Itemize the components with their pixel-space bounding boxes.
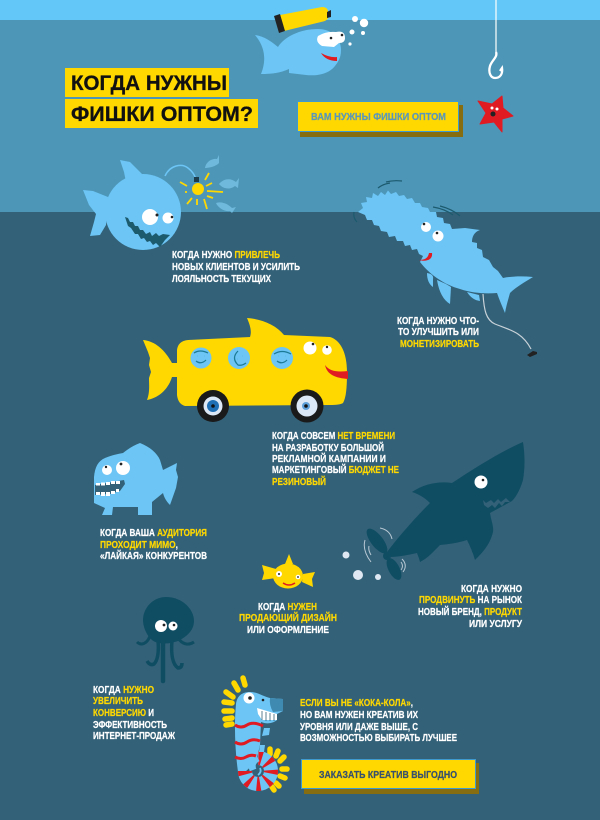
icon: diver fish with yellow tank <box>255 7 368 75</box>
text: promote brand: КОГДА НУЖНО <box>461 584 522 595</box>
text: conversion: КОГДА НУЖНО <box>93 685 154 696</box>
text: improve or monetize: КОГДА НУЖНО ЧТО- <box>397 316 479 327</box>
text: selling design: ПРОДАЮЩИЙ ДИЗАЙН <box>239 611 337 624</box>
text: conversion: ИНТЕРНЕТ-ПРОДАЖ <box>93 731 176 742</box>
button: order creative <box>302 760 479 794</box>
text: selling design <box>239 602 337 636</box>
text: promote brand <box>418 584 523 630</box>
text: attract clients: НОВЫХ КЛИЕНТОВ И УСИЛИТЬ <box>172 262 300 273</box>
icon: fishing hook <box>489 0 502 78</box>
text: selling design: ИЛИ ОФОРМЛЕНИЕ <box>247 625 329 636</box>
text: no time or budget <box>272 431 399 488</box>
text: audience passes by: ПРОХОДИТ МИМО, <box>100 540 178 551</box>
text: promote brand: ИЛИ УСЛУГУ <box>469 619 523 630</box>
text: no time or budget: РЕКЛАМНОЙ КАМПАНИИ И <box>272 452 386 465</box>
text: not coca-cola: ВОЗМОЖНОСТЬЮ ВЫБИРАТЬ ЛУЧШЕЕ <box>300 733 457 744</box>
button: order creative: ЗАКАЗАТЬ КРЕАТИВ ВЫГОДНО <box>319 770 457 781</box>
text: attract clients: КОГДА НУЖНО ПРИВЛЕЧЬ <box>172 250 280 261</box>
title: ФИШКИ ОПТОМ? <box>71 103 253 126</box>
text: audience passes by <box>100 528 207 562</box>
icon: small yellow fish <box>262 554 315 588</box>
button: top: ВАМ НУЖНЫ ФИШКИ ОПТОМ <box>311 112 446 123</box>
text: conversion: УВЕЛИЧИТЬ <box>93 696 143 707</box>
title <box>65 68 258 128</box>
text: attract clients: ЛОЯЛЬНОСТЬ ТЕКУЩИХ <box>172 274 271 285</box>
text: conversion: КОНВЕРСИЮ И <box>93 708 154 719</box>
text: no time or budget: РЕЗИНОВЫЙ <box>272 475 326 488</box>
icon: yellow fish bus <box>143 318 348 422</box>
text: improve or monetize: ТО УЛУЧШИТЬ ИЛИ <box>398 327 479 338</box>
text: conversion <box>93 685 176 742</box>
text: not coca-cola: ЕСЛИ ВЫ НЕ «КОКА-КОЛА», <box>300 698 413 709</box>
icon: sawfish with balloon string <box>354 181 537 357</box>
icon: anglerfish with lightbulb <box>83 155 239 250</box>
text: no time or budget: МАРКЕТИНГОВЫЙ БЮДЖЕТ НЕ <box>272 463 399 476</box>
icon: red starfish <box>478 96 513 132</box>
text: not coca-cola <box>300 698 457 744</box>
text: no time or budget: НА РАЗРАБОТКУ БОЛЬШОЙ <box>272 441 384 454</box>
text: not coca-cola: УРОВНЯ ИЛИ ДАЖЕ ВЫШЕ, С <box>300 722 418 733</box>
icon: seahorse <box>224 678 287 790</box>
text: attract clients <box>172 250 300 285</box>
icon: octopus <box>137 597 194 681</box>
text: not coca-cola: НО ВАМ НУЖЕН КРЕАТИВ ИХ <box>300 710 418 721</box>
text: audience passes by: «ЛАЙКАЯ» КОНКУРЕНТОВ <box>100 549 207 562</box>
text: improve or monetize: МОНЕТИЗИРОВАТЬ <box>400 339 479 350</box>
text: conversion: ЭФФЕКТИВНОСТЬ <box>93 720 167 731</box>
text: no time or budget: КОГДА СОВСЕМ НЕТ ВРЕМЕНИ <box>272 431 395 442</box>
text: promote brand: НОВЫЙ БРЕНД, ПРОДУКТ <box>418 605 522 618</box>
button: top <box>298 102 463 137</box>
text: improve or monetize <box>397 316 479 350</box>
text: audience passes by: КОГДА ВАША АУДИТОРИЯ <box>100 528 207 539</box>
text: promote brand: ПРОДВИНУТЬ НА РЫНОК <box>419 595 523 606</box>
title: КОГДА НУЖНЫ <box>71 72 227 95</box>
icon: piranha <box>94 443 178 515</box>
text: selling design: КОГДА НУЖЕН <box>258 602 317 613</box>
icon: dark shark with propeller <box>342 442 524 582</box>
